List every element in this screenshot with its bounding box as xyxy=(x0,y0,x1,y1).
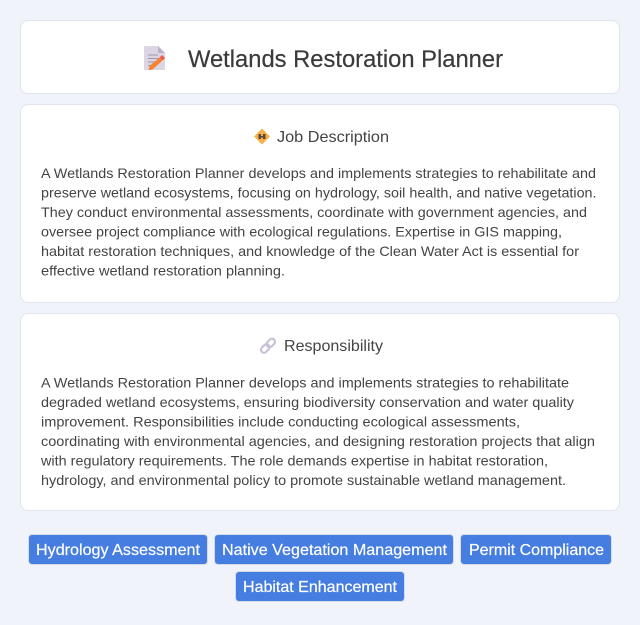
text block: job description: They conduct environmental assessments, coordinate with government agencies, and xyxy=(41,204,587,220)
text block: responsibility: A Wetlands Restoration Planner develops and implements strategies to rehabilitate xyxy=(41,374,569,390)
panel: responsibility card xyxy=(20,313,620,511)
text block: responsibility: with regulatory requirements. The role demands expertise in habitat restoration, xyxy=(40,452,548,468)
heading: responsibility: Responsibility xyxy=(284,338,383,355)
text block: job description: A Wetlands Restoration Planner develops and implements strategies to rehabilitate and xyxy=(41,165,596,181)
text block: job description: preserve wetland ecosystems, focusing on hydrology, soil health, and native vegetation. xyxy=(41,184,596,200)
text block: responsibility: coordinating with environmental agencies, and designing restoration projects that align xyxy=(41,433,595,449)
label: Habitat Enhancement: Habitat Enhancement xyxy=(243,579,398,596)
panel: job description card xyxy=(20,104,620,303)
text block: job description: oversee project compliance with ecological regulations. Expertise in GIS mapping, xyxy=(41,224,562,240)
text block: responsibility xyxy=(40,374,595,488)
panel: title card xyxy=(20,20,620,94)
icon: orange diamond xyxy=(254,128,270,144)
text block: responsibility: hydrology, and environmental policy to promote sustainable wetland management. xyxy=(41,472,566,488)
heading: job description: Job Description xyxy=(277,129,389,146)
skill tag: Native Vegetation Management xyxy=(214,534,454,565)
skill tag: Habitat Enhancement xyxy=(235,571,405,602)
icon: document with pencil xyxy=(144,46,165,70)
label: Native Vegetation Management: Native Vegetation Management xyxy=(222,542,448,559)
text block: responsibility: improvement. Responsibilities include conducting ecological assessments, xyxy=(41,414,520,430)
icon: link xyxy=(260,338,276,354)
label: Hydrology Assessment: Hydrology Assessment xyxy=(36,542,201,559)
title: Wetlands Restoration Planner xyxy=(188,46,503,73)
text block: job description xyxy=(41,165,596,278)
text block: responsibility: degraded wetland ecosystems, ensuring biodiversity conservation and water quality xyxy=(41,394,574,410)
skill tag: Permit Compliance xyxy=(460,534,612,565)
text block: job description: effective wetland restoration planning. xyxy=(41,262,285,278)
skill tag: Hydrology Assessment xyxy=(28,534,208,565)
text block: job description: habitat restoration techniques, and knowledge of the Clean Water Act is essential for xyxy=(41,243,579,259)
label: Permit Compliance: Permit Compliance xyxy=(469,542,604,559)
